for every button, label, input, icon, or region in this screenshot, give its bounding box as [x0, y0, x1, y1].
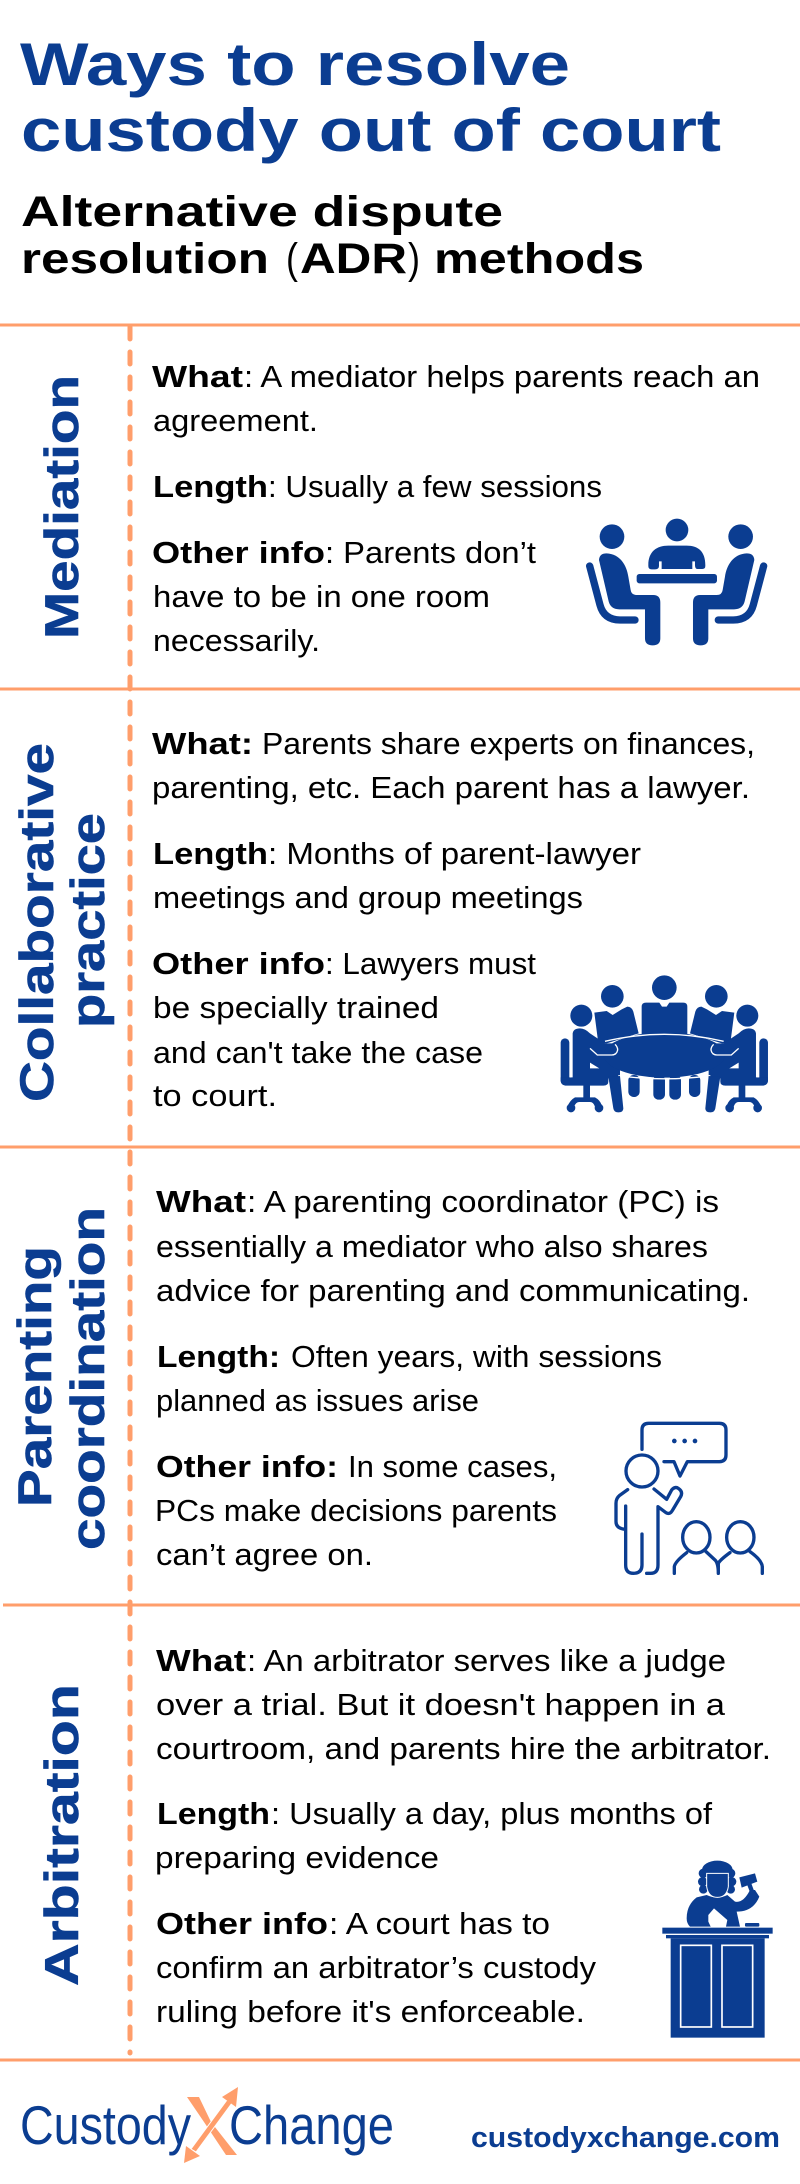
text: mediation other info: have to be in one room — [153, 579, 490, 614]
text: mediation what — [152, 359, 760, 438]
text: collaborative length: Length — [153, 836, 268, 871]
subtitle: methods — [434, 235, 644, 283]
text: parenting what — [156, 1184, 750, 1308]
heading: mediation: Mediation — [35, 375, 88, 639]
text: parenting other info: Other info: — [156, 1449, 338, 1484]
text: collaborative what: Parents share experts on finances, — [262, 726, 755, 761]
text: parenting other info — [155, 1449, 557, 1572]
text: arbitration length: Length — [157, 1796, 270, 1831]
text: collaborative what: What: — [152, 726, 253, 761]
text: arbitration other info — [156, 1906, 597, 2029]
footer url: custodyxchange.com — [471, 2122, 780, 2154]
text: parenting what: : A parenting coordinator (PC) is — [247, 1184, 719, 1219]
text: arbitration length: : Usually a day, plus months of — [271, 1796, 712, 1831]
text: parenting what: essentially a mediator who also shares — [156, 1229, 708, 1264]
panel: mediation — [35, 359, 764, 658]
text: mediation what: agreement. — [153, 403, 318, 438]
heading: collaborative practice: practice — [61, 813, 114, 1028]
text: parenting length: Length: — [157, 1339, 280, 1374]
text: parenting other info: In some cases, — [348, 1449, 557, 1484]
heading: parenting coordination: coordination — [61, 1207, 114, 1550]
heading: parenting coordination: Parenting — [8, 1246, 61, 1507]
icon: arbitrator with gavel at a bench — [662, 1861, 773, 2038]
text: collaborative other info — [152, 946, 536, 1113]
heading: collaborative practice: Collaborative — [10, 743, 63, 1102]
text: arbitration what — [156, 1643, 771, 1766]
panel: parenting coordination — [8, 1184, 762, 1573]
text: parenting length — [156, 1339, 662, 1418]
text: collaborative other info: be specially trained — [153, 990, 439, 1025]
text: parenting other info: PCs make decisions parents — [155, 1493, 557, 1528]
text: collaborative other info: and can't take the case — [153, 1035, 483, 1070]
text: parenting length: Often years, with sessions — [291, 1339, 662, 1374]
text: mediation length: : Usually a few sessions — [268, 469, 602, 504]
text: parenting what: advice for parenting and communicating. — [156, 1273, 750, 1308]
text: collaborative length: meetings and group meetings — [153, 880, 583, 915]
text: collaborative what — [152, 726, 755, 805]
text: collaborative other info: Other info — [152, 946, 325, 981]
text: mediation other info — [152, 535, 536, 658]
text: parenting length: planned as issues arise — [156, 1383, 479, 1418]
text: arbitration other info: ruling before it's enforceable. — [156, 1994, 585, 2029]
footer logo: Custody — [20, 2094, 191, 2156]
text: arbitration length: preparing evidence — [155, 1840, 439, 1875]
text: arbitration what: What — [156, 1643, 246, 1678]
text: collaborative other info: to court. — [153, 1078, 277, 1113]
text: arbitration what: over a trial. But it doesn't happen in a — [156, 1687, 726, 1722]
text: collaborative what: parenting, etc. Each parent has a lawyer. — [152, 770, 750, 805]
subtitle — [21, 188, 644, 283]
title: custody out of court — [21, 97, 721, 164]
footer logo — [20, 2087, 394, 2163]
heading: parenting coordination — [8, 1207, 114, 1550]
panel: arbitration — [35, 1643, 773, 2038]
text: mediation other info: : Parents don’t — [325, 535, 536, 570]
text: parenting other info: can’t agree on. — [156, 1537, 373, 1572]
text: mediation what: What — [152, 359, 243, 394]
subtitle: ) — [408, 235, 420, 283]
text: mediation other info: necessarily. — [153, 623, 320, 658]
text: arbitration other info: confirm an arbitrator’s custody — [156, 1950, 597, 1985]
text: arbitration other info: Other info — [156, 1906, 328, 1941]
footer logo: Change — [229, 2094, 394, 2156]
heading: arbitration: Arbitration — [35, 1684, 88, 1986]
icon: group around a conference table — [561, 975, 768, 1112]
text: arbitration other info: : A court has to — [329, 1906, 550, 1941]
text: arbitration what: : An arbitrator serves like a judge — [247, 1643, 726, 1678]
text: mediation length: Length — [153, 469, 268, 504]
subtitle: ADR — [300, 235, 407, 283]
subtitle: ( — [286, 235, 299, 283]
subtitle: Alternative dispute — [21, 188, 503, 236]
text: mediation what: : A mediator helps parents reach an — [244, 359, 760, 394]
text: arbitration what: courtroom, and parents hire the arbitrator. — [156, 1731, 771, 1766]
subtitle: resolution — [21, 235, 269, 283]
heading: collaborative practice — [10, 743, 114, 1102]
text: mediation other info: Other info — [152, 535, 325, 570]
text: arbitration length — [155, 1796, 712, 1875]
text: collaborative length: : Months of parent-lawyer — [268, 836, 641, 871]
title — [20, 31, 721, 164]
text: parenting what: What — [156, 1184, 246, 1219]
panel: collaborative practice — [10, 726, 768, 1113]
title: Ways to resolve — [20, 31, 570, 98]
text: collaborative other info: : Lawyers must — [325, 946, 536, 981]
icon: people at a table — [590, 519, 764, 645]
text: collaborative length — [153, 836, 641, 915]
icon: coordinator speaking to two parents — [616, 1423, 762, 1573]
